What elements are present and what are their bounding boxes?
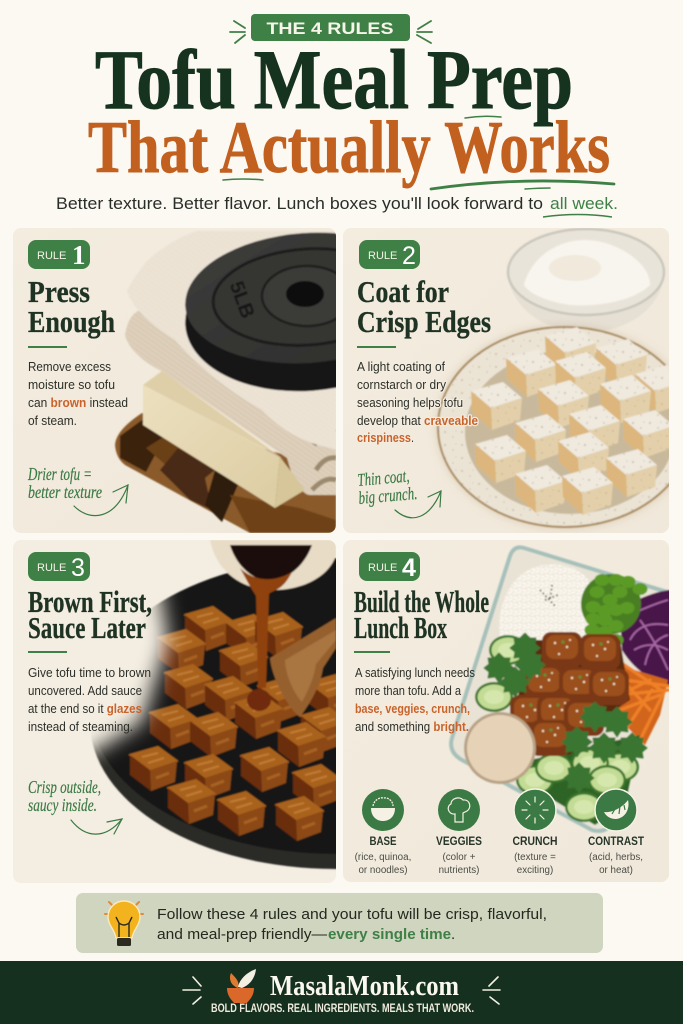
left fade of photo bbox=[88, 594, 183, 766]
body text: rule 1: of steam. bbox=[28, 414, 77, 428]
callout text: every single time bbox=[328, 926, 451, 943]
subtitle bbox=[56, 195, 618, 217]
callout text bbox=[157, 906, 547, 943]
body text: rule 2: crispiness. bbox=[357, 431, 414, 445]
body text: rule 1: moisture so tofu bbox=[28, 378, 115, 392]
tagline: BOLD FLAVORS. REAL INGREDIENTS. MEALS THAT WORK. bbox=[211, 1003, 474, 1015]
label: veggies: nutrients) bbox=[439, 865, 479, 876]
badge: rule 4: RULE bbox=[368, 562, 397, 574]
handwritten note: rule 2: Thin coat, bbox=[357, 466, 410, 490]
icon: light bulb bbox=[105, 901, 143, 946]
label: veggies: VEGGIES bbox=[436, 836, 482, 848]
label: base bbox=[355, 836, 411, 876]
badge: rule 3 bbox=[28, 552, 90, 582]
header badge: the 4 rules bbox=[230, 14, 432, 43]
label: veggies bbox=[436, 836, 482, 876]
callout: closing tip bbox=[76, 893, 603, 953]
illustration: skillet, glazed tofu, sauce, spoon bbox=[92, 540, 336, 870]
handwritten note: rule 1 bbox=[27, 464, 102, 502]
badge: rule 1: RULE bbox=[37, 250, 66, 262]
illustration: glass lunch box with tofu, rice, veggies and dressing bbox=[451, 547, 683, 831]
body text: rule 3: instead of steaming. bbox=[28, 720, 133, 734]
handwritten note: rule 3 bbox=[28, 777, 101, 815]
footer sparks bbox=[183, 977, 500, 1004]
body text: rule 3: uncovered. Add sauce bbox=[28, 684, 142, 698]
body text: rule 4: more than tofu. Add a bbox=[355, 684, 461, 698]
body text: rule 2: cornstarch or dry bbox=[357, 378, 447, 392]
label: base: BASE bbox=[370, 836, 397, 848]
heading: press enough: Press bbox=[28, 274, 90, 309]
subtitle: Better texture. Better flavor. Lunch boxes you'll look forward to bbox=[56, 195, 543, 213]
icon: veggies bbox=[438, 789, 480, 831]
heading: coat for crisp edges: Crisp Edges bbox=[357, 304, 491, 339]
badge: rule 3: 3 bbox=[71, 554, 85, 582]
label: contrast: (acid, herbs, bbox=[589, 852, 643, 863]
handwritten note: rule 3: saucy inside. bbox=[28, 795, 97, 815]
badge: rule 4 bbox=[359, 552, 420, 582]
illustration: flour bowl and plate of coated tofu bbox=[437, 229, 683, 528]
badge: rule 1: 1 bbox=[72, 240, 86, 270]
body text: rule 4 bbox=[355, 666, 475, 734]
heading: coat for crisp edges: Coat for bbox=[357, 274, 449, 309]
label: contrast: or heat) bbox=[599, 865, 633, 876]
title hand-drawn underlines bbox=[223, 116, 614, 189]
label: crunch: (texture = bbox=[514, 852, 556, 863]
heading: press enough: Enough bbox=[28, 304, 115, 339]
icon: mortar logo bbox=[227, 969, 256, 1003]
arrow: rule 3 bbox=[71, 819, 122, 834]
body text: rule 2: seasoning helps tofu bbox=[357, 396, 463, 410]
body text: rule 3: Give tofu time to brown bbox=[28, 666, 151, 680]
badge: rule 1 bbox=[28, 240, 90, 270]
body text: rule 3 bbox=[28, 666, 151, 734]
header badge: the 4 rules: THE 4 RULES bbox=[266, 19, 394, 38]
icon: crunch bbox=[514, 789, 556, 831]
callout text: and meal-prep friendly— bbox=[157, 926, 327, 943]
body text: rule 2: A light coating of bbox=[357, 360, 446, 374]
brand name: MasalaMonk.com bbox=[270, 971, 459, 1002]
label: veggies: (color + bbox=[443, 852, 476, 863]
badge: rule 2: RULE bbox=[368, 250, 397, 262]
heading: build the whole lunch box: Build the Whole bbox=[354, 584, 489, 619]
title line 1: Tofu Meal Prep bbox=[95, 33, 573, 127]
illustration: plate, towels, tofu on board: 5LB bbox=[225, 278, 258, 321]
body text: rule 1: can brown instead bbox=[28, 396, 128, 410]
badge: rule 2 bbox=[359, 240, 420, 270]
handwritten note: rule 2: big crunch. bbox=[358, 483, 418, 508]
heading: build the whole lunch box: Lunch Box bbox=[354, 610, 447, 645]
heading: brown first sauce later bbox=[28, 584, 152, 645]
arrow: rule 2 bbox=[395, 491, 441, 518]
handwritten note: rule 2 bbox=[357, 466, 418, 508]
panel: rule 3 brown first sauce later bbox=[13, 540, 336, 883]
icon: base bbox=[362, 789, 404, 831]
arrow: rule 1 bbox=[74, 485, 128, 516]
heading: brown first sauce later: Sauce Later bbox=[28, 610, 146, 645]
label: crunch bbox=[512, 836, 558, 876]
body text: rule 1 bbox=[28, 360, 128, 428]
label: crunch: exciting) bbox=[517, 865, 553, 876]
handwritten note: rule 1: Drier tofu = bbox=[27, 464, 92, 484]
heading: coat for crisp edges bbox=[357, 274, 491, 339]
panel: rule 2 coat for crisp edges bbox=[343, 228, 683, 533]
callout text: Follow these 4 rules and your tofu will be crisp, flavorful, bbox=[157, 906, 547, 923]
label: crunch: CRUNCH bbox=[512, 836, 558, 848]
heading: build the whole lunch box bbox=[354, 584, 489, 645]
handwritten note: rule 3: Crisp outside, bbox=[28, 777, 101, 797]
heading: brown first sauce later: Brown First, bbox=[28, 584, 152, 619]
icon: contrast bbox=[595, 789, 637, 831]
body text: rule 3: at the end so it glazes bbox=[28, 702, 142, 716]
body text: rule 4: and something bright. bbox=[355, 720, 469, 734]
subtitle: all week. bbox=[550, 195, 618, 213]
badge: rule 2: 2 bbox=[402, 242, 416, 270]
body text: rule 1: Remove excess bbox=[28, 360, 111, 374]
label: contrast: CONTRAST bbox=[588, 836, 644, 848]
label: contrast bbox=[588, 836, 644, 876]
body text: rule 4: base, veggies, crunch, bbox=[355, 702, 470, 716]
illustration: plate, towels, tofu on board bbox=[114, 231, 336, 533]
label: base: (rice, quinoa, bbox=[355, 852, 411, 863]
footer band bbox=[0, 961, 683, 1024]
body text: rule 2: develop that craveable bbox=[357, 414, 478, 428]
body text: rule 2 bbox=[357, 360, 478, 445]
panel: rule 4 build the whole lunch box bbox=[343, 540, 683, 882]
label: base: or noodles) bbox=[358, 865, 408, 876]
heading: press enough bbox=[28, 274, 115, 339]
badge: rule 4: 4 bbox=[402, 554, 416, 582]
badge: rule 3: RULE bbox=[37, 562, 66, 574]
body text: rule 4: A satisfying lunch needs bbox=[355, 666, 475, 680]
panel: rule 1 press enough bbox=[13, 228, 336, 533]
handwritten note: rule 1: better texture bbox=[28, 482, 102, 502]
callout text: . bbox=[451, 926, 455, 943]
